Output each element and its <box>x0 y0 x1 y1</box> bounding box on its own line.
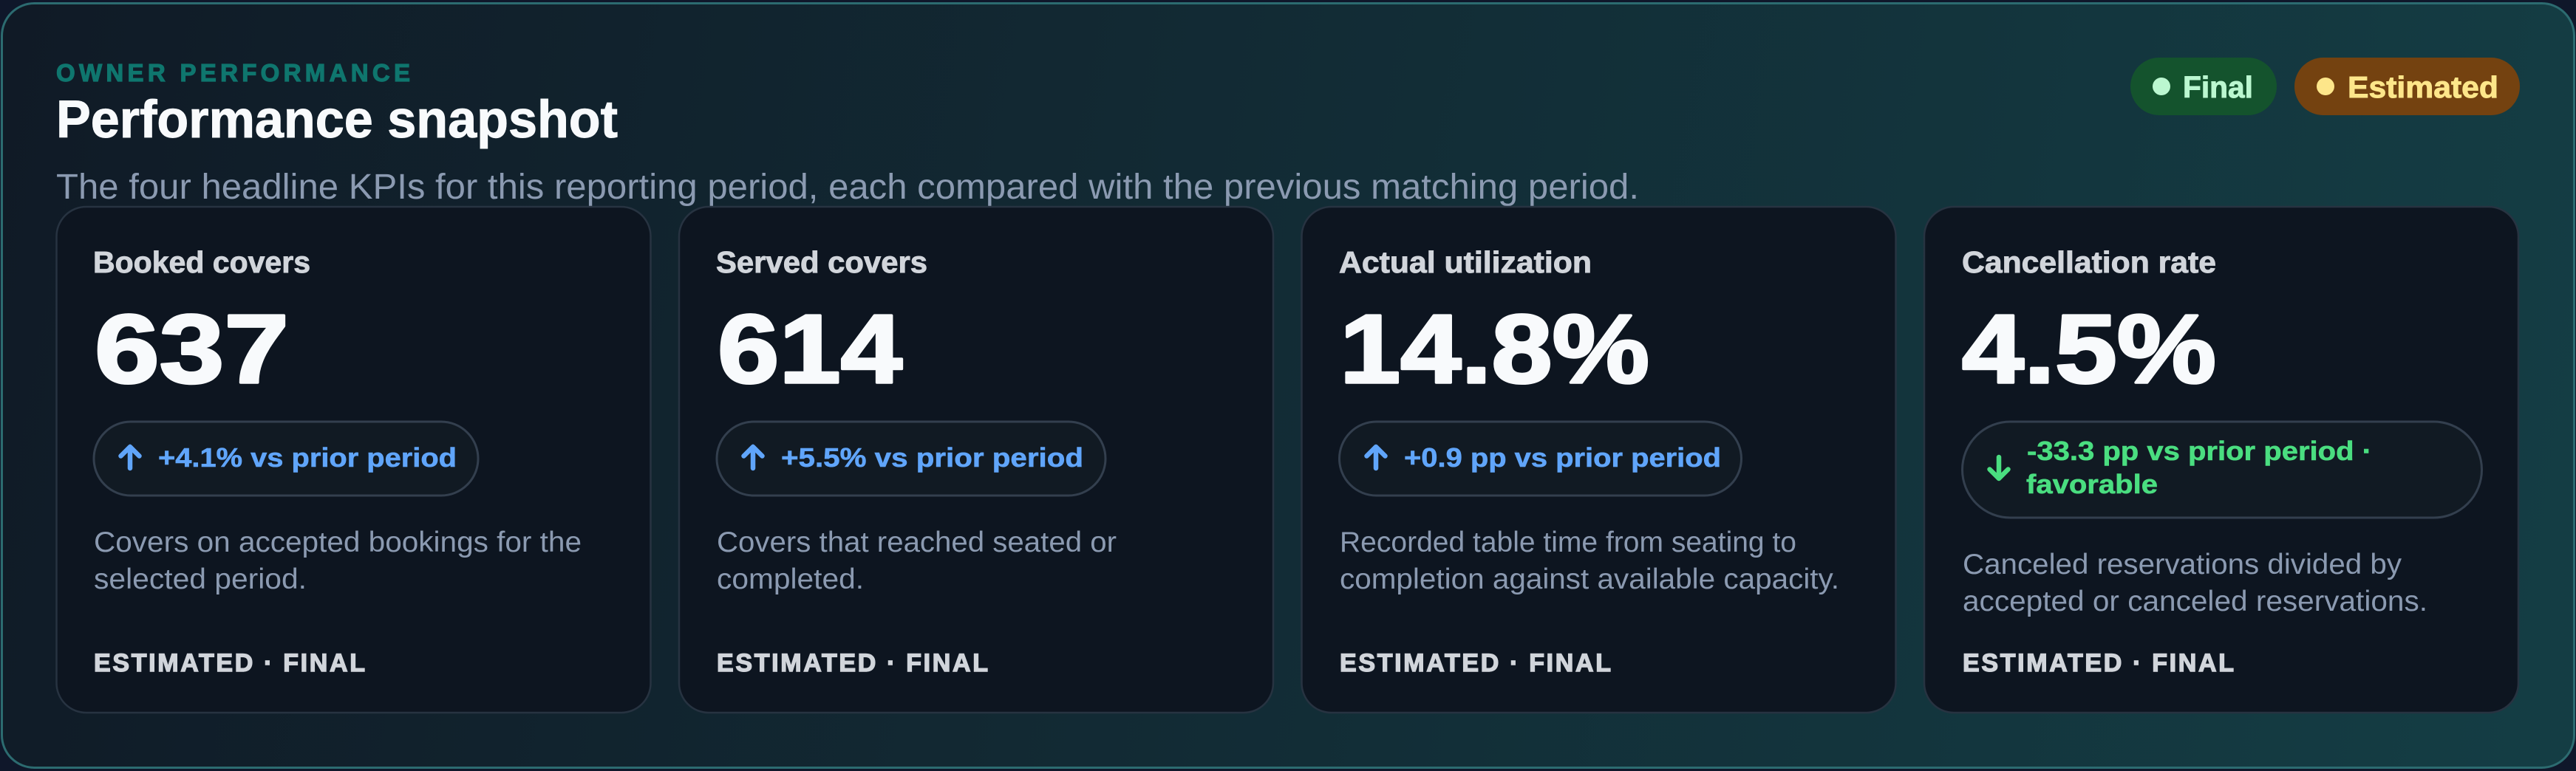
description: Covers on accepted bookings for the <box>94 527 582 558</box>
value: 614 <box>718 295 902 403</box>
description: Recorded table time from seating to <box>1340 527 1796 558</box>
status footer: ESTIMATED · FINAL <box>717 649 988 677</box>
description: completion against available capacity. <box>1340 563 1839 595</box>
trend pill: +5.5% vs prior period <box>781 442 1083 473</box>
trend pill: favorable <box>2026 469 2158 499</box>
description: Canceled reservations divided by <box>1963 549 2402 580</box>
description: selected period. <box>94 563 307 595</box>
status badge: estimated <box>2294 58 2520 115</box>
value: 4.5% <box>1962 295 2216 403</box>
label: Actual utilization <box>1339 245 1592 279</box>
label: Booked covers <box>93 245 310 279</box>
value: 14.8% <box>1340 295 1649 403</box>
description: Covers that reached seated or <box>717 527 1117 558</box>
trend pill: -33.3 pp vs prior period · <box>2027 436 2372 466</box>
title: Performance snapshot <box>56 91 618 149</box>
status footer: ESTIMATED · FINAL <box>94 649 365 677</box>
panel: cancellation rate <box>1924 207 2518 713</box>
panel: actual utilization <box>1302 207 1896 713</box>
eyebrow: OWNER PERFORMANCE <box>56 59 410 86</box>
panel: booked covers <box>56 207 650 713</box>
trend pill <box>717 422 1105 496</box>
trend pill: +0.9 pp vs prior period <box>1404 442 1721 473</box>
value: 637 <box>95 295 289 403</box>
trend pill <box>1339 422 1741 496</box>
status badge: estimated: Estimated <box>2348 70 2498 104</box>
label: Cancellation rate <box>1962 245 2216 279</box>
description: accepted or canceled reservations. <box>1963 586 2427 617</box>
description: completed. <box>717 563 864 595</box>
status footer: ESTIMATED · FINAL <box>1963 649 2234 677</box>
subtitle: The four headline KPIs for this reporting period, each compared with the previous matching period. <box>56 168 1639 207</box>
trend pill <box>1963 422 2481 518</box>
panel: served covers <box>679 207 1273 713</box>
status footer: ESTIMATED · FINAL <box>1340 649 1611 677</box>
label: Served covers <box>716 245 927 279</box>
status badge: final: Final <box>2183 70 2253 104</box>
trend pill: +4.1% vs prior period <box>158 442 457 473</box>
status badge: final <box>2130 58 2277 115</box>
trend pill <box>94 422 478 496</box>
